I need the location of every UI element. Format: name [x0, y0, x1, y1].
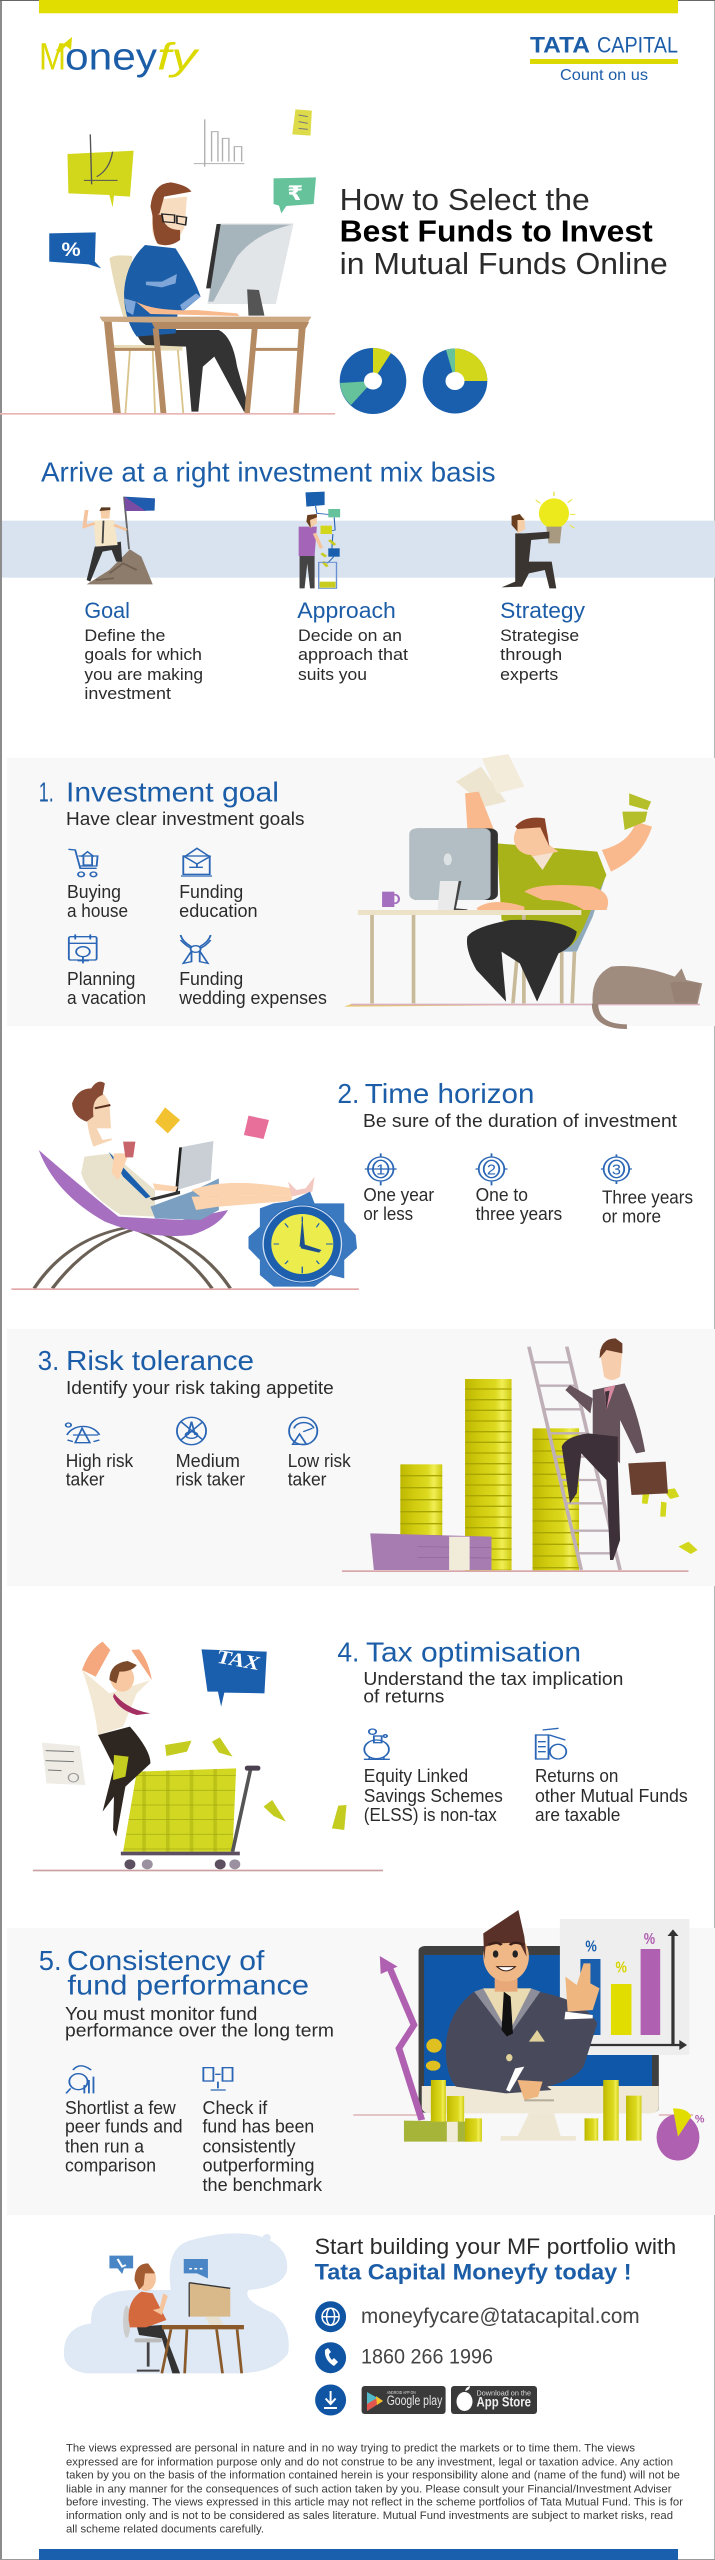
contact: phone: 1860 266 1996 [361, 2346, 493, 2369]
illustration: ladder and climbing businessman [529, 1338, 668, 1570]
heading: risk tolerance: 3. [38, 1345, 59, 1376]
disclaimer text: before investing. The views expressed in this article may not reflect in the scheme portfolios of Tata Mutual Fund. This is for [66, 2497, 683, 2509]
icon: three years or more: 3 [612, 1161, 621, 1178]
icon: low risk gauge [289, 1417, 317, 1445]
item: funding wedding expenses [178, 969, 327, 1008]
icon: high risk gauge [66, 1423, 99, 1443]
item: one year or less: or less [363, 1204, 413, 1224]
subheading: Understand the tax implication [363, 1668, 623, 1689]
item: funding education: education [179, 901, 258, 921]
item: planning a vacation [67, 969, 146, 1008]
item: one to three years: three years [476, 1204, 562, 1224]
item: funding education [179, 882, 258, 921]
item: funding wedding expenses: wedding expenses [178, 988, 327, 1008]
item: strategy: Strategise [500, 626, 579, 645]
logo: Tata Capital [530, 32, 678, 84]
badge: Google Play [362, 2386, 446, 2414]
item: goal: investment [84, 684, 171, 703]
heading: tax optimisation: 4. [337, 1637, 359, 1668]
item: approach: Approach [297, 598, 396, 623]
panel: 1 investment goal [7, 754, 715, 1027]
contact: email: moneyfycare@tatacapital.com [361, 2305, 640, 2328]
heading: time horizon: 2. [337, 1078, 359, 1109]
item: check benchmark: Check if [202, 2098, 268, 2118]
icon: blue percent bubble [49, 232, 101, 268]
icon: house in cart [68, 849, 98, 877]
logo: Tata Capital: Count on us [560, 67, 648, 84]
item: three years or more [602, 1188, 693, 1227]
icon: one year: 1 [376, 1161, 385, 1178]
panel: 2 time horizon [11, 1078, 693, 1290]
panel: 5 consistency of fund performance [7, 1910, 715, 2215]
icon: wedding ribbon bells [181, 935, 211, 963]
pie chart 2 [423, 348, 487, 414]
illustration: excited man and cart of cash [42, 1642, 347, 1869]
heading: tax optimisation: Tax optimisation [366, 1637, 581, 1668]
item: three years or more: Three years [602, 1188, 693, 1208]
badge: App Store [451, 2386, 537, 2414]
icon: green rupee bubble [274, 177, 316, 213]
item: planning a vacation: Planning [67, 969, 135, 989]
bottom blue bar [39, 2549, 678, 2560]
item: planning a vacation: a vacation [67, 988, 146, 1008]
item: one to three years [476, 1185, 562, 1224]
illustration: monitor and presenter with chart: % [644, 1931, 655, 1948]
item: goal: Define the [84, 626, 165, 645]
heading: consistency: 5. [39, 1945, 62, 1976]
icon: yellow chart bubble [67, 134, 134, 207]
logo: Tata Capital: CAPITAL [597, 32, 678, 57]
heading: start building: Start building your MF portfolio with [315, 2234, 676, 2259]
item: ELSS [364, 1766, 503, 1825]
item: medium risk taker: risk taker [176, 1470, 245, 1490]
disclaimer text: all scheme related documents carefully. [66, 2524, 264, 2536]
illustration: monitor and presenter with chart [353, 1910, 693, 2141]
illustration: cash and coins [404, 2039, 642, 2142]
heading: Tata Capital Moneyfy today: Tata Capital Moneyfy today ! [315, 2259, 632, 2284]
item: one year or less: One year [363, 1185, 434, 1205]
item: goal [84, 598, 203, 703]
subheading: Identify your risk taking appetite [66, 1377, 334, 1398]
item: strategy: experts [500, 665, 558, 684]
logo: Moneyfy [39, 36, 200, 78]
item: low risk taker [288, 1451, 352, 1490]
badge: Google Play: Google play [387, 2393, 442, 2408]
illustration: clock gear [248, 1192, 357, 1287]
pie chart 1 [340, 348, 406, 414]
item: one to three years: One to [476, 1185, 528, 1205]
item: buying a house: Buying [67, 882, 121, 902]
panel: 4 tax optimisation [33, 1637, 688, 1871]
icon: one to three years [476, 1153, 507, 1185]
item: approach: approach that [298, 645, 408, 664]
item: shortlist peer funds: comparison [65, 2156, 156, 2176]
icon: vacation calendar [69, 934, 97, 963]
illustration: coin stacks and cash [370, 1379, 698, 1570]
item: low risk taker: taker [288, 1470, 326, 1490]
heading: risk tolerance: Risk tolerance [66, 1345, 254, 1376]
icon: three years or more [601, 1154, 632, 1184]
item: check benchmark: fund has been [202, 2117, 314, 2137]
subheading: Be sure of the duration of investment [363, 1110, 677, 1131]
item: ELSS: Savings Schemes [364, 1786, 503, 1806]
chair [109, 255, 183, 413]
illustration: goal man on mountain with flag [84, 497, 155, 584]
heading: investment goal: Investment goal [66, 777, 279, 808]
icon: piggy bank [364, 1729, 390, 1759]
desk [99, 317, 311, 413]
illustration: man relaxing in chair with laptop [34, 1082, 315, 1288]
logo: Moneyfy: M [39, 36, 66, 78]
item: buying a house: a house [67, 901, 128, 921]
subheading: performance over the long term [65, 2020, 334, 2041]
panel: investment mix [2, 457, 715, 703]
item: low risk taker: Low risk [288, 1451, 352, 1471]
item: goal: Goal [84, 598, 130, 623]
heading: consistency: fund performance [67, 1969, 309, 2000]
subheading: Have clear investment goals [66, 808, 304, 829]
subheading [363, 1668, 623, 1707]
logo: Moneyfy: oney [65, 36, 157, 78]
item: medium risk taker: Medium [176, 1451, 240, 1471]
title [340, 183, 668, 281]
item: shortlist peer funds: then run a [65, 2137, 145, 2157]
item: high risk taker [66, 1451, 134, 1490]
icon: one to three years: 2 [487, 1161, 496, 1178]
icon: shortlist magnifier [66, 2066, 93, 2093]
top yellow bar [39, 0, 678, 13]
arrow: rising purple [380, 1956, 422, 2120]
disclaimer text: liable in any manner for the consequences of such action taken by you. Please consult your Financial/Investment Adviser [66, 2484, 672, 2496]
item: strategy: through [500, 645, 562, 664]
heading: investment goal: 1. [39, 777, 54, 808]
item: check benchmark: the benchmark [202, 2175, 323, 2195]
item: funding education: Funding [179, 882, 243, 902]
title: in Mutual Funds Online [340, 247, 668, 281]
item: ELSS: (ELSS) is non-tax [364, 1805, 497, 1825]
item: other funds [535, 1766, 688, 1825]
item: shortlist peer funds [65, 2098, 183, 2176]
item: strategy: Strategy [500, 598, 585, 623]
subheading [65, 2003, 334, 2041]
icon: calculator and rupee [536, 1728, 566, 1759]
logo: Tata Capital: TATA [530, 32, 590, 57]
item: approach [297, 598, 408, 684]
item: check benchmark: outperforming [202, 2156, 314, 2176]
item: goal: you are making [84, 665, 203, 684]
contact: download badges [315, 2384, 537, 2416]
icon: TAX speech bubble: TAX [214, 1646, 263, 1675]
item: other funds: Returns on [535, 1766, 618, 1786]
icon: green rupee bubble: ₹ [287, 182, 303, 205]
item: three years or more: or more [602, 1207, 661, 1227]
icon: bar chart sketch [194, 119, 244, 167]
heading: time horizon: Time horizon [365, 1078, 534, 1109]
panel: 3 risk tolerance [7, 1329, 715, 1586]
icon: sticky note [292, 109, 312, 136]
illustration: approach man with idea flow [299, 492, 340, 588]
item: check benchmark [202, 2098, 323, 2195]
item: medium risk taker [176, 1451, 245, 1490]
illustration: monitor and presenter with chart: % [585, 1938, 597, 1956]
illustration: man at desk with bubbles [0, 109, 335, 415]
badge: App Store: Download on the [476, 2388, 531, 2397]
title: Best Funds to Invest [340, 215, 653, 249]
illustration: support agent at desk: ... [188, 2260, 204, 2272]
item: high risk taker: taker [66, 1470, 104, 1490]
item: high risk taker: High risk [66, 1451, 134, 1471]
illustration: strategy man with light bulb [502, 492, 575, 588]
illustration: man with papers, money and computer [344, 754, 700, 1007]
item: strategy [500, 598, 585, 684]
disclaimer text: expressed are for information purpose only and do not construe to be any investment, legal or taxation advice. Any action [66, 2457, 673, 2469]
illustration: monitor and presenter with chart: % [616, 1959, 627, 1977]
badge: Google Play: ANDROID APP ON [387, 2390, 416, 2395]
icon: blue percent bubble: % [62, 238, 81, 260]
item: approach: suits you [298, 665, 367, 684]
man [124, 182, 250, 412]
item: funding wedding expenses: Funding [179, 969, 243, 989]
heading: consistency: Consistency of [67, 1945, 265, 1976]
contact: email [315, 2301, 640, 2332]
icon: education laptop [181, 848, 212, 876]
item: ELSS: Equity Linked [364, 1766, 468, 1786]
item: one year or less [363, 1185, 434, 1224]
title: How to Select the [340, 183, 590, 217]
icon: medium risk gauge [177, 1417, 206, 1445]
illustration: support agent at desk [64, 2233, 289, 2373]
item: shortlist peer funds: Shortlist a few [65, 2098, 177, 2118]
subheading: You must monitor fund [65, 2003, 257, 2024]
disclaimer text: The views expressed are personal in nature and in no way trying to predict the markets or to time them. The views [66, 2443, 635, 2455]
contact: phone [315, 2342, 493, 2373]
item: approach: Decide on an [298, 626, 402, 645]
item: other funds: other Mutual Funds [535, 1786, 688, 1806]
icon: compare scales [203, 2068, 233, 2090]
heading: consistency [39, 1945, 309, 2000]
disclaimer text: information only and is not to be considered as sales literature. Mutual Fund investments are subject to market risks, read [66, 2510, 673, 2522]
item: check benchmark: consistently [202, 2137, 296, 2157]
logo: Moneyfy: fy [157, 36, 200, 78]
disclaimer text: taken by you on the basis of the information contained herein is your responsibility alone and (name of the fund) will not be [66, 2470, 680, 2482]
subheading: of returns [363, 1686, 444, 1707]
illustration: cat [592, 966, 702, 1027]
disclaimer text [66, 2443, 683, 2536]
item: other funds: are taxable [535, 1805, 620, 1825]
item: goal: goals for which [84, 645, 202, 664]
item: buying a house [67, 882, 128, 921]
icon: TAX speech bubble [202, 1646, 267, 1707]
heading: investment mix: Arrive at a right investment mix basis [41, 457, 496, 488]
chart: small pie: % [695, 2113, 704, 2125]
panel: call to action [64, 2233, 676, 2416]
chart: small pie [657, 2108, 704, 2161]
icon: one year [365, 1153, 397, 1185]
badge: App Store: App Store [476, 2394, 531, 2410]
computer monitor [206, 223, 294, 316]
item: shortlist peer funds: peer funds and [65, 2117, 183, 2137]
